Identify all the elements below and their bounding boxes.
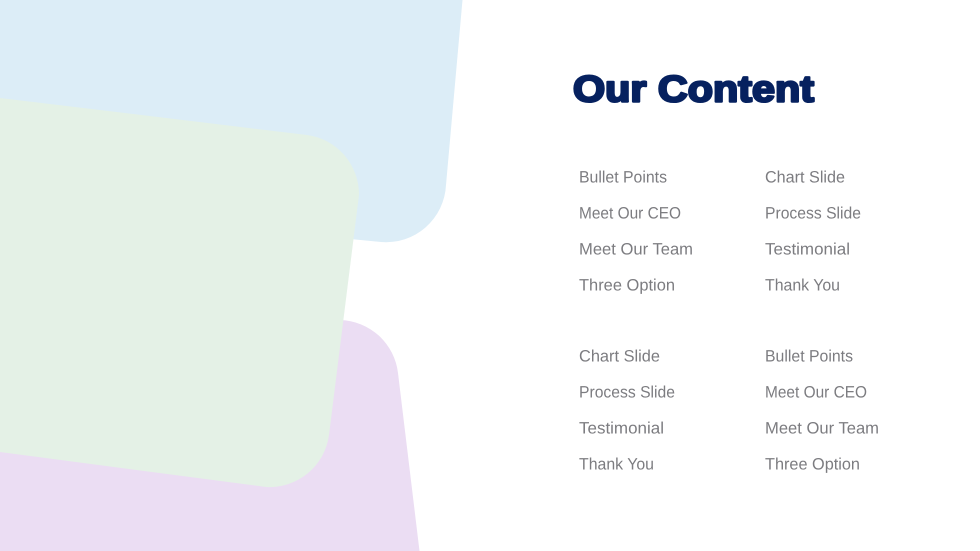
text block: list top left: Three Option bbox=[579, 276, 675, 294]
panel: green rounded shape bbox=[0, 98, 359, 487]
text block: list bottom right: Meet Our Team bbox=[765, 420, 879, 438]
text block: list bottom left: Process Slide bbox=[579, 384, 675, 402]
text block: list bottom right: Three Option bbox=[765, 456, 860, 474]
text block: list bottom right: Meet Our CEO bbox=[765, 384, 867, 402]
text block: list bottom left: Thank You bbox=[579, 456, 654, 474]
text block: list top right: Testimonial bbox=[765, 240, 850, 258]
text block: list top right: Chart Slide bbox=[765, 168, 845, 186]
text block: list bottom left: Testimonial bbox=[579, 420, 664, 438]
panel: purple rounded shape bbox=[0, 320, 420, 551]
text block: list top left: Bullet Points bbox=[579, 168, 667, 186]
title: Our Content bbox=[573, 68, 814, 110]
text block: list top left: Meet Our CEO bbox=[579, 204, 681, 222]
text block: list bottom right bbox=[765, 348, 879, 474]
panel: blue rounded shape bbox=[0, 0, 462, 242]
text block: list top left bbox=[579, 168, 693, 294]
text block: list top right: Process Slide bbox=[765, 204, 861, 222]
text block: list bottom right: Bullet Points bbox=[765, 348, 853, 366]
text block: list top right: Thank You bbox=[765, 276, 840, 294]
text block: list top left: Meet Our Team bbox=[579, 240, 693, 258]
text block: list top right bbox=[765, 168, 861, 294]
text block: list bottom left bbox=[579, 348, 675, 474]
text block: list bottom left: Chart Slide bbox=[579, 348, 660, 366]
